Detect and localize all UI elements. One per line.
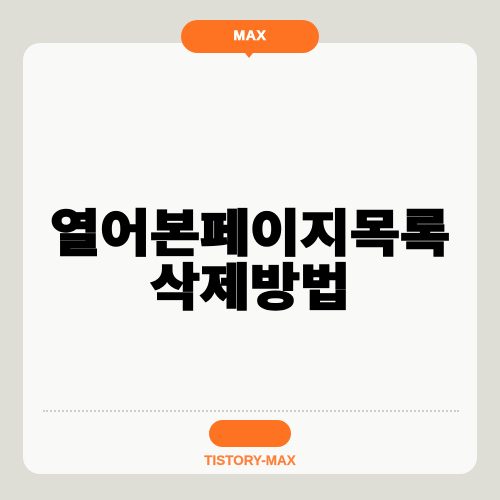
dotted divider [43, 410, 459, 412]
badge: MAX: MAX [234, 27, 266, 43]
badge pointer [245, 53, 253, 58]
footer pill [209, 420, 291, 447]
title: 열어본페이지목록 [50, 194, 450, 266]
badge: MAX [181, 20, 319, 53]
footer label: TISTORY-MAX [204, 453, 296, 468]
title: 삭제방법 [150, 248, 350, 320]
panel: main card [23, 43, 477, 474]
